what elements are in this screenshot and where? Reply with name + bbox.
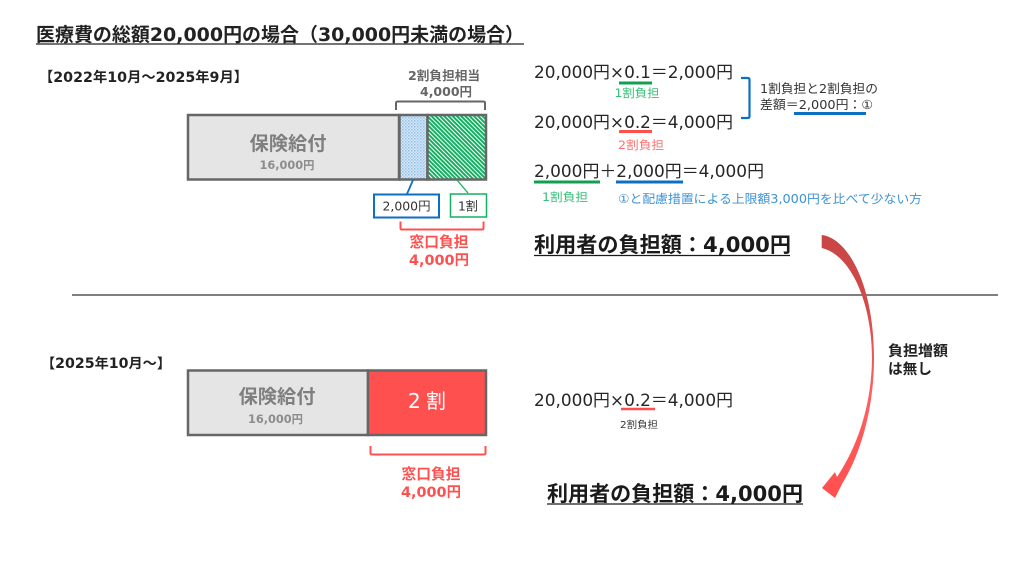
callout: 1割: 1割 (458, 198, 478, 214)
segment: green hatched (428, 115, 486, 180)
note: difference: 差額＝2,000円：① (760, 97, 873, 112)
result: before: 利用者の負担額：4,000円 (534, 233, 791, 257)
formula: sum: 1割負担 (542, 190, 588, 204)
segment: insurance benefit (188, 370, 368, 435)
curved arrow (822, 235, 874, 498)
segment: blue dotted (400, 115, 428, 180)
label: 窓口負担 after: 4,000円 (401, 485, 461, 501)
label: 窓口負担 after (401, 465, 461, 501)
connector: green (457, 180, 468, 193)
label: 窓口負担 before: 4,000円 (409, 253, 469, 269)
segment: insurance benefit (188, 115, 399, 180)
result: after: 利用者の負担額：4,000円 (547, 482, 803, 506)
period label: after: 【2025年10月～】 (41, 355, 171, 372)
formula: sum (534, 161, 922, 206)
formula: 2割: 20,000円×0.2＝4,000円 (534, 112, 733, 132)
period label: before: 【2022年10月～2025年9月】 (39, 69, 248, 86)
divider (72, 294, 998, 296)
label: 窓口負担 before: 窓口負担 (410, 233, 469, 251)
formula: sum: 2,000円＋2,000円＝4,000円 (534, 161, 764, 181)
note: difference (760, 81, 878, 114)
note: no increase (888, 342, 949, 378)
callout: 2,000円 (374, 194, 439, 218)
label: 2割負担相当: 4,000円 (420, 84, 472, 99)
label: 2割負担相当: 2割負担相当 (408, 68, 480, 83)
formula: 1割 (534, 62, 733, 100)
formula: 2割: 2割負担 (618, 138, 664, 152)
formula: 2割 (534, 112, 733, 152)
formula: after (534, 390, 733, 431)
stacked bar: before (188, 115, 486, 180)
bracket: 窓口負担 after (370, 446, 486, 454)
bracket: difference (741, 78, 750, 118)
note: difference: 1割負担と2割負担の (760, 81, 878, 96)
title: 医療費の総額20,000円の場合（30,000円未満の場合） (36, 24, 524, 46)
label: 2割負担相当 (408, 68, 480, 99)
callout: 2,000円: 2,000円 (382, 198, 430, 214)
note: no increase: 負担増額 (888, 342, 949, 360)
segment: 2割 (368, 370, 486, 435)
label: 窓口負担 before (409, 233, 469, 269)
bracket: 2割負担相当 (396, 102, 485, 110)
formula: after: 2割負担 (620, 419, 659, 431)
segment: insurance benefit: 16,000円 (260, 159, 314, 172)
segment: 2割: 2 割 (408, 389, 446, 413)
segment: insurance benefit: 保険給付 (238, 386, 316, 408)
callout: 1割 (450, 194, 486, 217)
formula: after: 20,000円×0.2＝4,000円 (534, 390, 733, 410)
formula: sum: ①と配慮措置による上限額3,000円を比べて少ない方 (618, 191, 922, 206)
note: no increase: は無し (888, 361, 932, 378)
connector: blue (407, 180, 413, 194)
formula: 1割: 20,000円×0.1＝2,000円 (534, 62, 733, 82)
label: 窓口負担 after: 窓口負担 (402, 465, 461, 483)
bracket: 窓口負担 before (400, 222, 484, 230)
stacked bar: after (188, 370, 486, 435)
formula: 1割: 1割負担 (614, 86, 660, 100)
segment: insurance benefit: 保険給付 (250, 133, 326, 155)
segment: insurance benefit: 16,000円 (248, 413, 303, 426)
